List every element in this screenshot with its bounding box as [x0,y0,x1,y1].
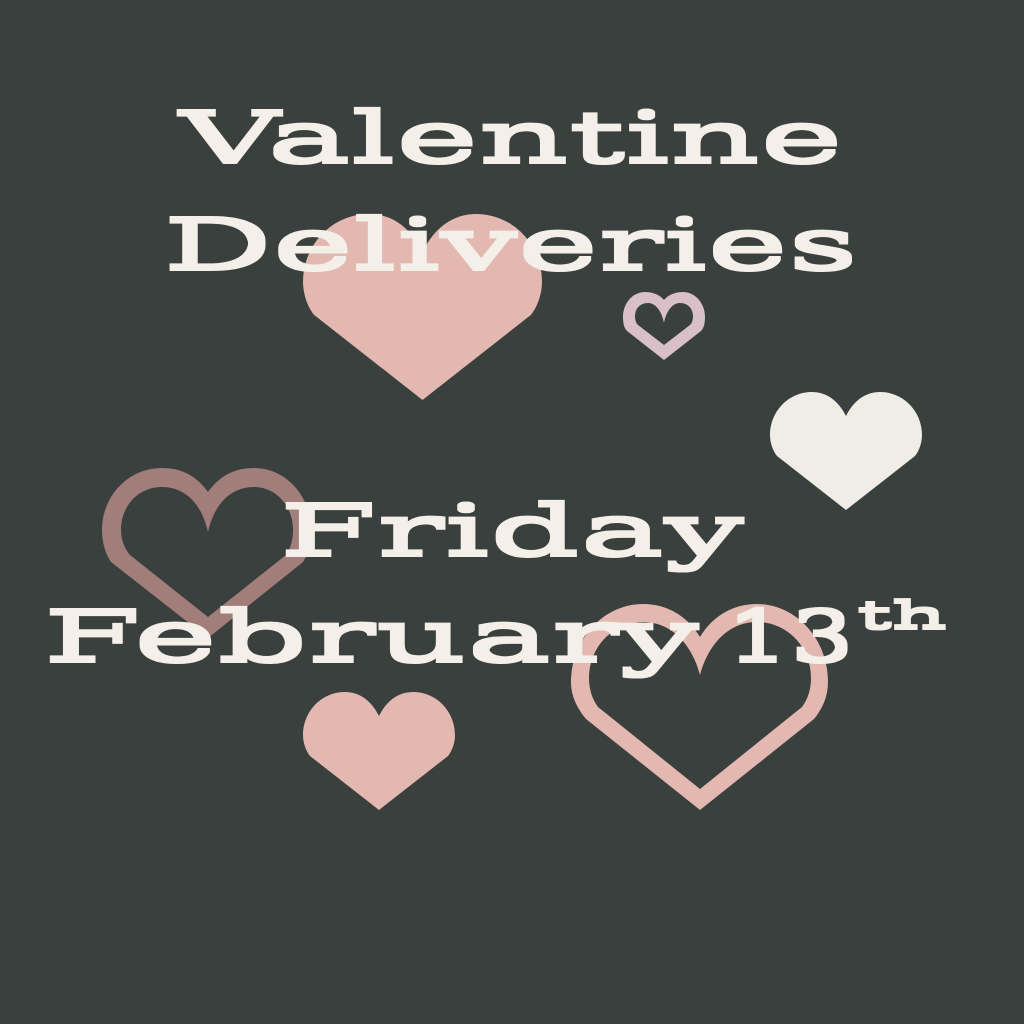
icon: large filled pink heart [303,214,542,400]
title [163,97,858,286]
icon: brown outlined heart [102,468,311,638]
title line: Deliveries: Deliveries [163,204,858,286]
icon: cream filled heart [770,392,922,510]
icon: small outlined mauve heart [623,292,705,360]
icon: bottom filled pink heart [303,692,455,810]
title line: Valentine: Valentine [177,97,843,179]
date line: February: February [43,596,700,678]
date superscript: th: th [857,596,947,637]
date text [43,490,947,678]
date line: Friday: Friday [279,490,745,572]
date line: 13: 13 [726,596,854,678]
icon: large outlined pink heart [571,604,828,810]
